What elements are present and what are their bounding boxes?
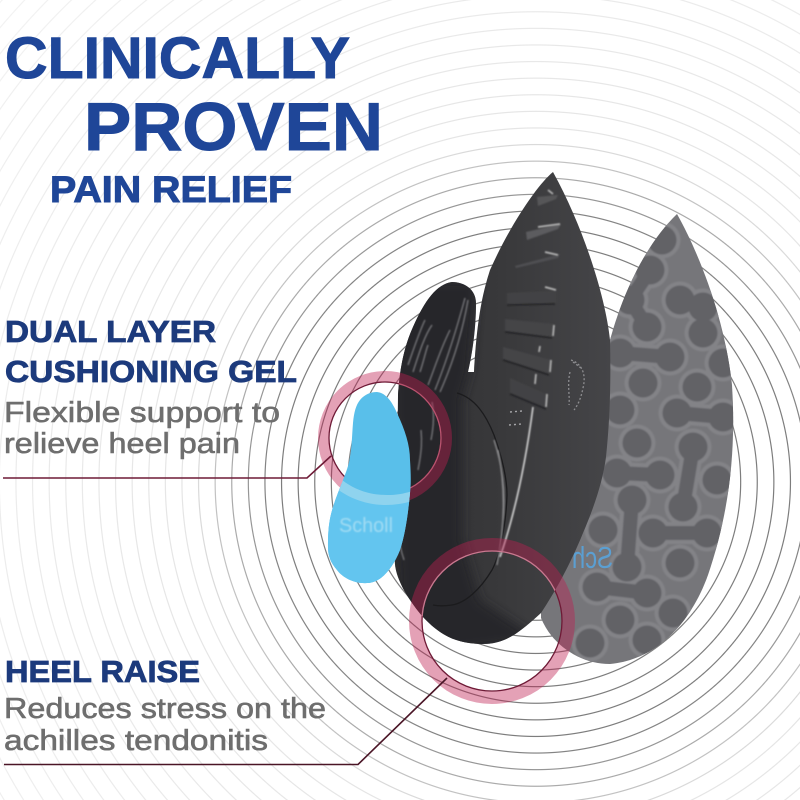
- darker side section: [394, 282, 526, 644]
- description: achilles tendonitis: achilles tendonitis: [4, 725, 268, 757]
- feature text: dual layer cushioning gel: [4, 315, 297, 460]
- callout circle: heel: [416, 544, 568, 698]
- grey patterned insole: [541, 214, 733, 664]
- description: flexible support: Flexible support to: [4, 397, 280, 429]
- blue gel heel pad: [328, 392, 411, 584]
- title: [5, 26, 383, 210]
- gel layer band: [328, 480, 410, 584]
- gel brand text: Scholl: [339, 515, 393, 537]
- main insole body: [395, 172, 610, 644]
- ridge shadows: [503, 304, 555, 409]
- gel texture highlights: [399, 298, 468, 560]
- description: reduces stress: Reduces stress on the: [4, 693, 326, 725]
- arch ridges: [503, 195, 561, 408]
- title line: pain relief: PAIN RELIEF: [50, 169, 292, 210]
- central spine highlight: [500, 407, 533, 557]
- mirrored brand text on insole: Sch: [572, 540, 613, 575]
- heading: cushioning gel: CUSHIONING GEL: [5, 355, 297, 389]
- feature text: heel raise: [4, 654, 326, 757]
- heel contour line: [433, 393, 507, 606]
- heading: dual layer: DUAL LAYER: [5, 315, 216, 349]
- heading: heel raise: HEEL RAISE: [5, 654, 200, 689]
- black insole: [390, 172, 610, 660]
- spine highlights: [535, 190, 560, 407]
- callout circle: gel: [324, 376, 446, 500]
- foot logo: [569, 360, 584, 410]
- title line: clinically: CLINICALLY: [5, 26, 350, 91]
- leader line: heel: [4, 678, 447, 764]
- title line: proven: PROVEN: [84, 89, 383, 165]
- small dotted mark: [509, 411, 522, 425]
- leader line: gel: [3, 456, 331, 478]
- heel highlights: [494, 440, 504, 565]
- description: relieve heel pain: relieve heel pain: [4, 428, 240, 460]
